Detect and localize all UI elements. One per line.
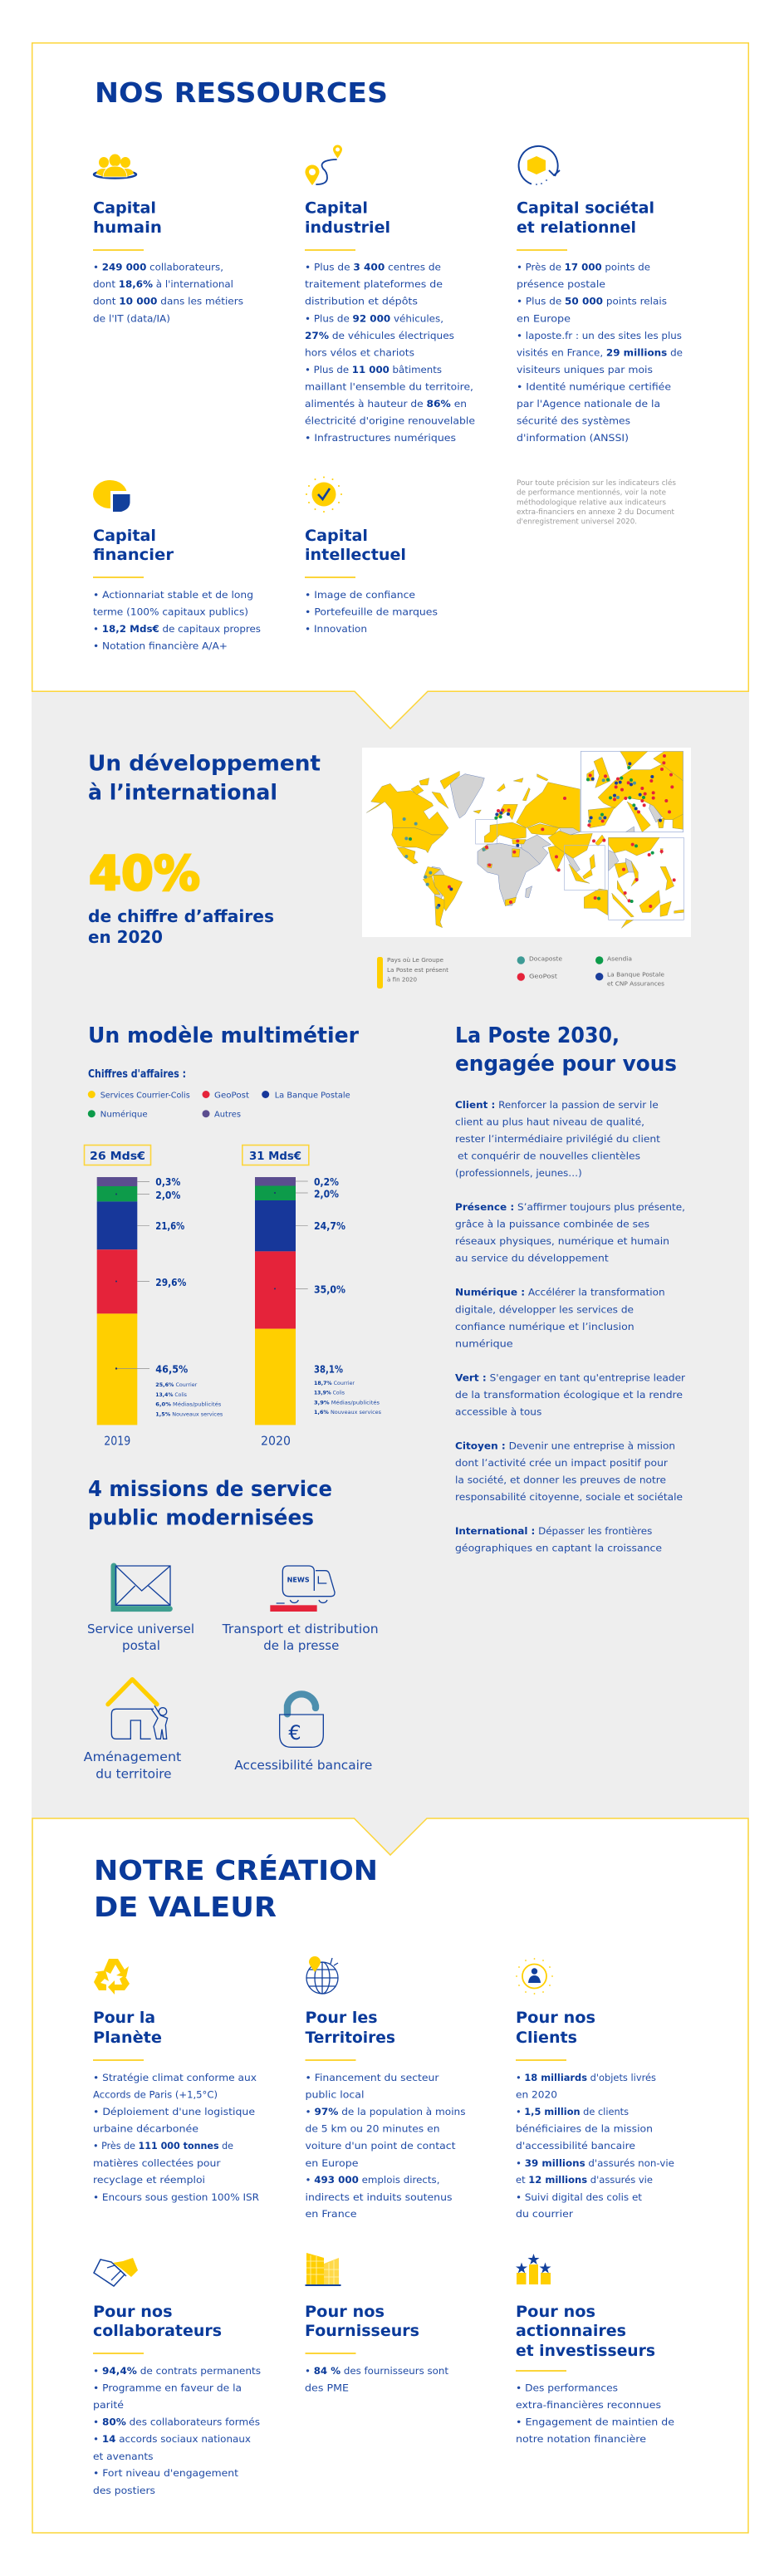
list: dont 10 000 dans les métiers xyxy=(93,296,243,307)
list: par l'Agence nationale de la xyxy=(517,398,660,410)
list: indirects et induits soutenus xyxy=(306,2191,453,2203)
list: présence postale xyxy=(517,278,605,290)
list: notre notation financière xyxy=(516,2433,646,2445)
icon: podium stars xyxy=(516,2254,551,2284)
inset: south-east asia xyxy=(609,837,683,920)
map legend xyxy=(377,955,664,989)
chart legend: La Banque Postale xyxy=(275,1092,350,1100)
list: • 84 % des fournisseurs sont xyxy=(305,2365,449,2377)
stacked bar 2020: 18,7% Courrier xyxy=(314,1380,355,1386)
list: • Près de 111 000 tonnes de xyxy=(93,2140,233,2152)
list: sécurité des systèmes xyxy=(517,415,630,427)
commitment: numerique: Numérique : Accélérer la transformation xyxy=(455,1287,665,1298)
heading: Pour nos xyxy=(516,2303,595,2321)
label xyxy=(84,1749,181,1782)
stacked bar 2019: 13,4% Colis xyxy=(155,1391,188,1398)
chart legend: Numérique xyxy=(100,1110,148,1120)
list: matières collectées pour xyxy=(93,2157,221,2169)
heading xyxy=(88,1477,332,1531)
map legend: La Banque Postale xyxy=(607,972,664,979)
list: dont 18,6% à l'international xyxy=(93,278,233,290)
list: en 2020 xyxy=(516,2088,557,2100)
heading xyxy=(93,199,162,237)
list: • 39 millions d'assurés non-vie xyxy=(516,2157,674,2169)
stacked bar 2020: 2020 xyxy=(261,1434,291,1449)
list: public local xyxy=(306,2088,364,2100)
heading xyxy=(93,2303,222,2340)
panel frame with notch xyxy=(32,1818,748,2533)
list: recyclage et réemploi xyxy=(93,2174,205,2186)
mission: universal postal service xyxy=(87,1566,194,1653)
commitment: client: Client : Renforcer la passion de servir le xyxy=(455,1099,659,1111)
map legend: Docaposte xyxy=(529,955,562,962)
commitment: client: et conquérir de nouvelles clientèles xyxy=(458,1150,640,1161)
card: capital financier xyxy=(93,480,261,651)
panel: notre creation de valeur xyxy=(32,1818,748,2533)
heading: industriel xyxy=(305,218,390,237)
commitment: presence: au service du développement xyxy=(455,1253,609,1264)
chart subheading: Chiffres d'affaires : xyxy=(88,1068,186,1081)
icon: building xyxy=(306,2253,341,2286)
heading: intellectuel xyxy=(305,546,406,564)
heading: Capital xyxy=(305,199,368,218)
heading xyxy=(306,2009,395,2047)
list: • Notation financière A/A+ xyxy=(93,640,228,651)
stacked bar 2020: 2,0% xyxy=(314,1187,339,1200)
heading: Pour la xyxy=(93,2009,155,2027)
mission: press transport xyxy=(222,1566,379,1653)
heading: Pour nos xyxy=(305,2303,385,2321)
map markers xyxy=(403,754,676,909)
list: et avenants xyxy=(93,2451,154,2462)
label xyxy=(87,1622,194,1653)
stacked bar 2019: 25,6% Courrier xyxy=(155,1381,198,1388)
commitment: international xyxy=(455,1525,662,1554)
commitment: vert xyxy=(455,1371,685,1417)
heading: public modernisées xyxy=(88,1506,314,1531)
commitment: citoyen: Citoyen : Devenir une entreprise à mission xyxy=(455,1440,675,1452)
stacked bar 2020: 38,1% xyxy=(314,1362,343,1376)
map legend: Asendia xyxy=(607,955,632,962)
chart legend: Autres xyxy=(214,1111,241,1120)
stacked bar 2020: 24,7% xyxy=(314,1219,345,1232)
heading: Capital xyxy=(93,199,156,218)
mission: banking accessibility xyxy=(234,1694,372,1773)
list: bénéficiaires de la mission xyxy=(516,2123,653,2135)
list: 27% de véhicules électriques xyxy=(305,330,454,341)
icon: people xyxy=(94,155,136,178)
heading: humain xyxy=(93,218,162,237)
world map xyxy=(362,748,691,937)
panel frame with notch xyxy=(32,43,748,729)
commitment: citoyen: la société, et donner les preuves de notre xyxy=(455,1474,666,1486)
list: • Plus de 11 000 bâtiments xyxy=(305,364,442,375)
list: • Financement du secteur xyxy=(306,2072,439,2083)
commitment: vert: de la transformation écologique et la rendre xyxy=(455,1389,683,1401)
list: de 5 km ou 20 minutes en xyxy=(306,2123,440,2135)
stacked bar 2020: 35,0% xyxy=(314,1283,345,1295)
list: • Plus de 50 000 points relais xyxy=(517,296,667,307)
list: hors vélos et chariots xyxy=(305,347,414,359)
list: • Engagement de maintien de xyxy=(516,2416,674,2427)
icon: padlock euro: € xyxy=(288,1721,301,1744)
list: • Suivi digital des colis et xyxy=(516,2191,643,2203)
list: visiteurs uniques par mois xyxy=(517,364,653,375)
icon: recycling xyxy=(94,1959,130,1995)
stat: 40%: 40% xyxy=(89,846,200,901)
map legend: GeoPost xyxy=(529,974,557,980)
label xyxy=(222,1622,379,1653)
heading: Territoires xyxy=(306,2029,395,2047)
list xyxy=(516,2382,674,2445)
commitment: client: client au plus haut niveau de qualité, xyxy=(455,1116,644,1127)
list: • 14 accords sociaux nationaux xyxy=(93,2433,251,2445)
list: maillant l'ensemble du territoire, xyxy=(305,380,473,392)
list: visités en France, 29 millions de xyxy=(517,347,683,359)
heading: et relationnel xyxy=(517,218,636,237)
commitment: vert: accessible à tous xyxy=(455,1406,541,1417)
card: capital humain xyxy=(93,155,243,324)
label: Accessibilité bancaire xyxy=(234,1758,372,1773)
grey middle background xyxy=(32,691,749,1856)
panel: nos ressources xyxy=(32,43,748,729)
stacked bar 2019: 26 Mds€ xyxy=(90,1150,145,1163)
heading xyxy=(516,2009,595,2047)
card: capital societal xyxy=(517,146,683,444)
list xyxy=(517,261,683,444)
list: des postiers xyxy=(93,2485,155,2496)
icon: route pins xyxy=(305,145,342,185)
stacked bar 2020: 13,9% Colis xyxy=(314,1389,345,1396)
list: • 1,5 million de clients xyxy=(516,2106,629,2117)
label: postal xyxy=(122,1638,160,1653)
heading: à l’international xyxy=(88,781,277,806)
heading: Pour nos xyxy=(93,2303,173,2321)
heading: actionnaires xyxy=(516,2322,626,2340)
list: • Fort niveau d'engagement xyxy=(93,2467,239,2479)
stacked bar 2019: 6,0% Médias/publicités xyxy=(155,1401,222,1408)
list: • 97% de la population à moins xyxy=(306,2106,465,2117)
footnote: méthodologique relative aux indicateurs xyxy=(517,498,667,507)
stacked bar 2020: 3,9% Médias/publicités xyxy=(314,1399,380,1406)
icon: check badge xyxy=(306,477,342,513)
commitment: numerique xyxy=(455,1287,665,1349)
list: • Image de confiance xyxy=(305,589,415,601)
commitment: citoyen: responsabilité citoyenne, sociale et sociétale xyxy=(455,1491,683,1503)
list: • Déploiement d'une logistique xyxy=(93,2106,255,2117)
list xyxy=(93,261,243,324)
commitment: client xyxy=(455,1099,661,1179)
commitment: presence: grâce à la puissance combinée de ses xyxy=(455,1219,649,1230)
list: • Infrastructures numériques xyxy=(305,432,456,444)
heading: Pour nos xyxy=(516,2009,595,2027)
list xyxy=(93,2365,261,2496)
list: • 493 000 emplois directs, xyxy=(306,2174,440,2186)
icon: client badge xyxy=(516,1958,553,1995)
list: voiture d'un point de contact xyxy=(306,2140,456,2152)
footnote: Pour toute précision sur les indicateurs clés xyxy=(517,478,677,488)
heading xyxy=(455,1023,677,1077)
title: DE VALEUR xyxy=(94,1891,277,1923)
list: du courrier xyxy=(516,2208,573,2220)
stacked bar 2019: 2,0% xyxy=(155,1189,181,1201)
stacked bar 2019 xyxy=(85,1145,223,1449)
heading: Capital xyxy=(305,527,368,545)
list: • Plus de 3 400 centres de xyxy=(305,261,441,272)
commitment: numerique: digitale, développer les services de xyxy=(455,1303,634,1315)
title: NOTRE CRÉATION xyxy=(94,1853,378,1887)
panel: multi-business model xyxy=(85,1023,382,1449)
commitment: numerique: numérique xyxy=(455,1337,513,1349)
map legend: La Poste est présent xyxy=(387,967,448,974)
label: Service universel xyxy=(87,1622,194,1636)
commitment: vert: Vert : S'engager en tant qu'entreprise leader xyxy=(455,1371,685,1383)
heading: Planète xyxy=(93,2029,162,2047)
list: en Europe xyxy=(306,2157,359,2169)
heading xyxy=(305,199,390,237)
panel: la poste 2030 xyxy=(455,1023,685,1554)
stacked bar 2020: 0,2% xyxy=(314,1175,339,1188)
list: Accords de Paris (+1,5°C) xyxy=(93,2088,218,2100)
list: • Plus de 92 000 véhicules, xyxy=(305,312,443,324)
list: parité xyxy=(93,2399,124,2411)
stat caption: de chiffre d’affaires xyxy=(88,906,274,926)
label: du territoire xyxy=(96,1767,172,1782)
heading: collaborateurs xyxy=(93,2322,222,2340)
icon: cube in circular arrow xyxy=(519,146,560,185)
footnote: de performance mentionnés, voir la note xyxy=(517,488,666,498)
footnote xyxy=(517,478,677,527)
map legend: à fin 2020 xyxy=(387,977,417,984)
inset: europe xyxy=(581,751,683,832)
list: • Innovation xyxy=(305,623,367,635)
chart legend: GeoPost xyxy=(214,1092,249,1100)
list: • Stratégie climat conforme aux xyxy=(93,2072,257,2083)
stacked bar 2019: 46,5% xyxy=(155,1362,189,1376)
commitment: presence: Présence : S’affirmer toujours plus présente, xyxy=(455,1201,685,1213)
list: extra-financières reconnues xyxy=(516,2399,661,2411)
commitment: citoyen: dont l’activité crée un impact positif pour xyxy=(455,1457,668,1469)
heading: Fournisseurs xyxy=(305,2322,419,2340)
stacked bar 2020 xyxy=(243,1145,382,1449)
list: • Actionnariat stable et de long xyxy=(93,589,253,601)
commitment: client: (professionnels, jeunes…) xyxy=(455,1167,582,1179)
heading xyxy=(93,2009,162,2047)
list: alimentés à hauteur de 86% en xyxy=(305,398,467,410)
list: • 80% des collaborateurs formés xyxy=(93,2416,260,2427)
list: électricité d'origine renouvelable xyxy=(305,415,475,427)
card: territoires xyxy=(306,1956,465,2220)
list: • Programme en faveur de la xyxy=(93,2382,242,2394)
icon: globe and pin xyxy=(306,1956,338,1994)
commitment: citoyen xyxy=(455,1440,683,1503)
list xyxy=(305,589,438,635)
footnote: d'enregistrement universel 2020. xyxy=(517,518,637,527)
card: capital industriel xyxy=(305,145,475,444)
stat caption: en 2020 xyxy=(88,927,163,947)
heading: Clients xyxy=(516,2029,577,2047)
stacked bar 2020: 1,6% Nouveaux services xyxy=(314,1409,382,1416)
title xyxy=(94,1853,378,1923)
footnote: extra-financiers en annexe 2 du Document xyxy=(517,508,675,517)
card: collaborateurs xyxy=(93,2258,261,2496)
list: des PME xyxy=(305,2382,349,2394)
heading xyxy=(93,527,174,564)
heading xyxy=(305,2303,419,2340)
list: • Des performances xyxy=(516,2382,618,2394)
stat caption xyxy=(88,906,274,947)
heading: et investisseurs xyxy=(516,2342,655,2360)
heading xyxy=(516,2303,655,2360)
list: en Europe xyxy=(517,312,571,324)
heading xyxy=(517,199,654,237)
list: terme (100% capitaux publics) xyxy=(93,606,248,618)
list: • 18,2 Mds€ de capitaux propres xyxy=(93,623,261,635)
heading: Pour les xyxy=(306,2009,377,2027)
list: traitement plateformes de xyxy=(305,278,443,290)
card: actionnaires xyxy=(516,2254,674,2445)
stacked bar 2019: 21,6% xyxy=(155,1219,185,1232)
stacked bar 2019: 29,6% xyxy=(155,1276,187,1288)
heading: Un développement xyxy=(88,751,321,776)
label: de la presse xyxy=(263,1638,339,1653)
commitment: international: International : Dépasser les frontières xyxy=(455,1525,652,1537)
list xyxy=(305,261,475,444)
heading: 4 missions de service xyxy=(88,1477,332,1502)
heading xyxy=(305,527,406,564)
heading: Un modèle multimétier xyxy=(88,1023,359,1048)
card: capital intellectuel xyxy=(305,477,438,635)
list: d'accessibilité bancaire xyxy=(516,2140,635,2152)
commitment: presence xyxy=(455,1201,685,1264)
icon: handshake xyxy=(94,2258,138,2286)
card: fournisseurs xyxy=(305,2253,449,2394)
list: et 12 millions d'assurés vie xyxy=(516,2174,653,2186)
list: de l'IT (data/IA) xyxy=(93,312,170,324)
list: • 18 milliards d'objets livrés xyxy=(516,2072,656,2083)
list: • Portefeuille de marques xyxy=(305,606,438,618)
list: • Identité numérique certifiée xyxy=(517,380,671,392)
list: • 94,4% de contrats permanents xyxy=(93,2365,261,2377)
commitment: presence: réseaux physiques, numérique et humain xyxy=(455,1235,669,1247)
stacked bar 2020: 31 Mds€ xyxy=(249,1150,301,1163)
stacked bar 2019: 0,3% xyxy=(155,1175,181,1188)
label: Aménagement xyxy=(84,1749,181,1764)
stacked bar 2019: 1,5% Nouveaux services xyxy=(155,1411,223,1417)
heading: engagée pour vous xyxy=(455,1052,677,1077)
list xyxy=(305,2365,449,2394)
icon: pie chart xyxy=(93,480,131,513)
list: • 249 000 collaborateurs, xyxy=(93,261,223,272)
commitment: international: géographiques en captant la croissance xyxy=(455,1543,662,1554)
card: planete xyxy=(93,1959,259,2203)
list xyxy=(93,589,261,651)
heading: La Poste 2030, xyxy=(455,1023,620,1048)
heading xyxy=(88,751,321,806)
icon: news truck: NEWS xyxy=(287,1576,310,1583)
map legend: Pays où Le Groupe xyxy=(387,957,443,964)
stacked bar 2019: 2019 xyxy=(104,1434,130,1449)
list: • Près de 17 000 points de xyxy=(517,261,650,272)
mission: territory planning xyxy=(84,1680,181,1782)
list: distribution et dépôts xyxy=(305,296,418,307)
list: d'information (ANSSI) xyxy=(517,432,629,444)
title: NOS RESSOURCES xyxy=(95,76,388,109)
label: Transport et distribution xyxy=(222,1622,379,1636)
icon: house and person xyxy=(108,1680,168,1739)
list: • laposte.fr : un des sites les plus xyxy=(517,330,682,341)
list xyxy=(306,2072,465,2220)
heading: financier xyxy=(93,546,174,564)
commitment: numerique: confiance numérique et l’inclusion xyxy=(455,1321,634,1332)
map legend: et CNP Assurances xyxy=(607,980,664,987)
list: en France xyxy=(306,2208,357,2220)
panel: international development xyxy=(88,748,691,989)
list: • Encours sous gestion 100% ISR xyxy=(93,2191,259,2203)
heading: Capital sociétal xyxy=(517,199,654,218)
icon: envelope xyxy=(114,1566,170,1609)
list xyxy=(516,2072,674,2220)
chart legend: Services Courrier-Colis xyxy=(100,1092,190,1100)
icon: news truck xyxy=(270,1566,335,1612)
list xyxy=(93,2072,259,2203)
heading: Capital xyxy=(93,527,156,545)
panel: public service missions xyxy=(84,1477,379,1782)
list: urbaine décarbonée xyxy=(93,2123,198,2135)
icon: padlock euro xyxy=(280,1694,323,1747)
commitment: client: rester l’intermédiaire privilégié du client xyxy=(455,1133,661,1145)
chart legend xyxy=(88,1091,350,1120)
card: clients xyxy=(516,1958,674,2220)
